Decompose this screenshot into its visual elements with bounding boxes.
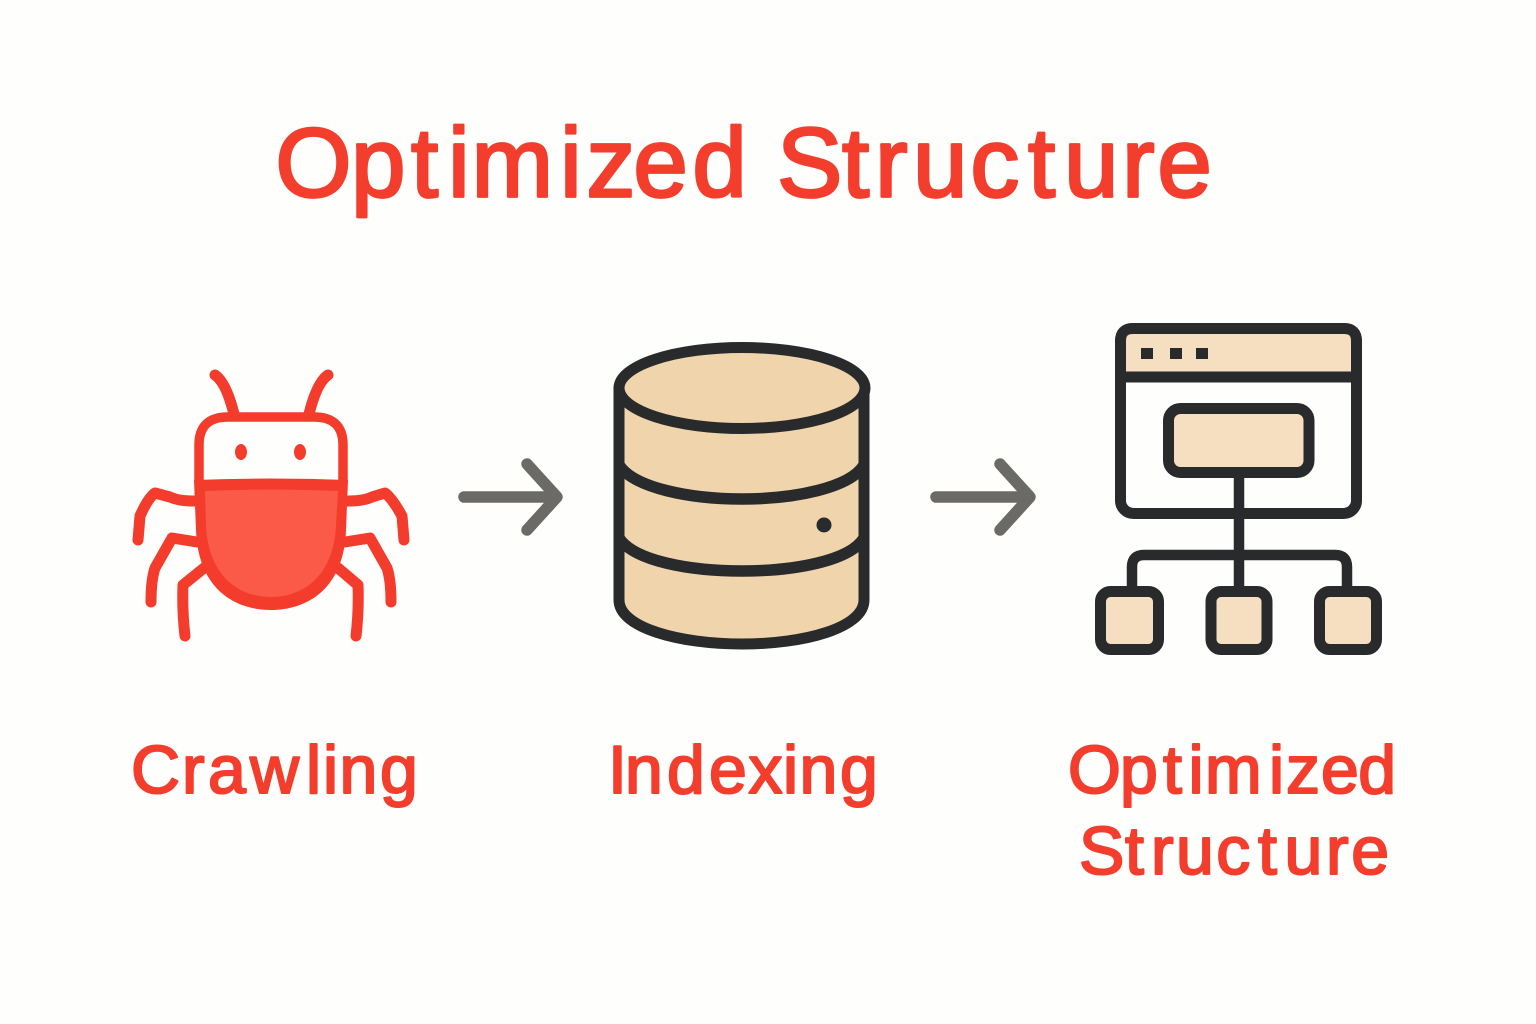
database dot	[816, 518, 832, 532]
arrow: crawling to indexing	[464, 464, 557, 530]
label: crawling: Crawling	[131, 732, 418, 808]
label: optimized structure: Structure	[1079, 813, 1389, 889]
browser window	[1120, 328, 1356, 514]
icon: site structure	[1100, 328, 1376, 650]
title: Structure	[777, 108, 1212, 218]
parent box	[1168, 408, 1309, 472]
icon: crawler bug	[138, 375, 404, 636]
label: optimized structure: Optimized	[1068, 732, 1396, 808]
bug body	[194, 478, 348, 610]
header dots	[1141, 348, 1208, 359]
bug eyes	[235, 444, 306, 460]
title: Optimized	[275, 108, 747, 218]
title	[275, 108, 1212, 218]
label: optimized structure	[1068, 732, 1396, 889]
child box right	[1320, 592, 1376, 650]
bug belly	[205, 490, 338, 597]
label: indexing: Indexing	[608, 732, 878, 808]
child box middle	[1211, 592, 1267, 650]
connectors	[1132, 478, 1347, 590]
icon: database	[619, 348, 865, 644]
arrow: indexing to optimized structure	[936, 464, 1030, 530]
browser header	[1120, 328, 1356, 377]
child box left	[1100, 592, 1158, 650]
